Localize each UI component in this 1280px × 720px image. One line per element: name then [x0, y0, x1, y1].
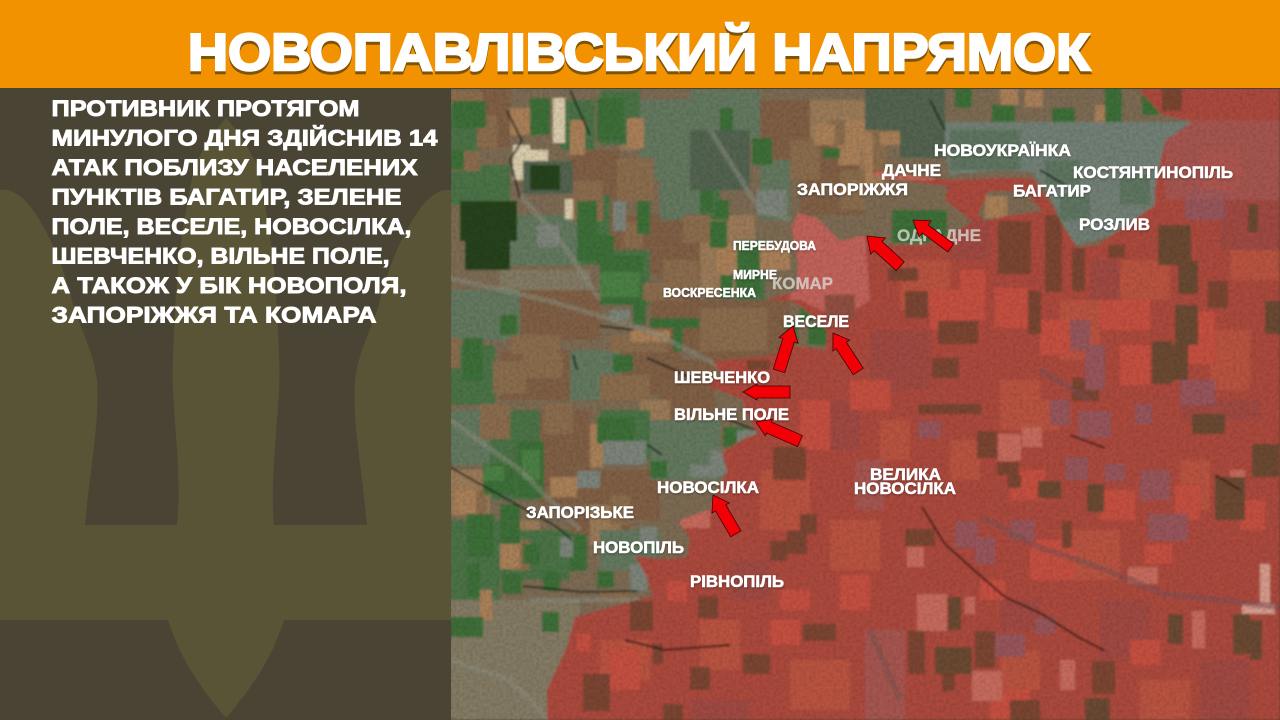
arrow: toward Новосілка	[704, 490, 744, 539]
faded settlement labels: ОДРАДНЕ	[897, 226, 981, 245]
map: satellite field mosaic with occupied zone	[450, 88, 1280, 720]
heading: attack summary text: А ТАКОЖ У БІК НОВОПОЛЯ,	[52, 273, 406, 298]
settlement labels: ВЕСЕЛЕ	[783, 313, 849, 331]
faded settlement labels: КОМАР	[772, 274, 833, 293]
arrow: toward Вільне Поле	[752, 414, 804, 449]
settlement labels: НОВОСІЛКА	[657, 479, 759, 497]
arrow: toward Веселе from south	[769, 323, 803, 374]
heading: attack summary text	[52, 96, 438, 328]
settlement labels: РОЗЛИВ	[1079, 216, 1150, 234]
heading: attack summary text: ПУНКТІВ БАГАТИР, ЗЕЛЕНЕ	[52, 184, 402, 210]
settlement labels: ЗАПОРІЖЖЯ	[797, 181, 908, 199]
arrow: toward Шевченко	[743, 384, 790, 400]
settlement labels: МИРНЕ	[733, 267, 777, 282]
settlement labels: БАГАТИР	[1013, 182, 1091, 200]
settlement labels: ВОСКРЕСЕНКА	[663, 285, 757, 300]
arrow: toward Одрадне	[907, 212, 957, 256]
heading: attack summary text: ЗАПОРІЖЖЯ ТА КОМАРА	[52, 302, 376, 328]
panel: left background with trident	[0, 88, 451, 720]
arrow: toward Веселе from south-east	[825, 328, 867, 377]
heading: attack summary text: АТАК ПОБЛИЗУ НАСЕЛЕНИХ	[52, 155, 417, 180]
settlement labels: НОВОУКРАЇНКА	[934, 142, 1071, 160]
heading: attack summary text: ПРОТИВНИК ПРОТЯГОМ	[52, 96, 360, 121]
settlement labels: ДАЧНЕ	[882, 162, 941, 180]
settlement labels: ВІЛЬНЕ ПОЛЕ	[674, 406, 789, 424]
icon: trident emblem	[0, 118, 451, 718]
faded settlement labels	[772, 226, 981, 293]
heading: attack summary text: МИНУЛОГО ДНЯ ЗДІЙСНИВ 14	[52, 126, 438, 150]
settlement labels: ЗАПОРІЗЬКЕ	[526, 504, 634, 522]
settlement labels	[526, 142, 1233, 591]
region: Комар built-up zone	[790, 213, 870, 320]
settlement labels: КОСТЯНТИНОПІЛЬ	[1073, 164, 1233, 182]
settlement labels: НОВОСІЛКА	[854, 480, 956, 498]
settlement labels: НОВОПІЛЬ	[593, 539, 684, 557]
heading: attack summary text: ПОЛЕ, ВЕСЕЛЕ, НОВОСІЛКА,	[52, 214, 412, 239]
region: occupied area	[546, 89, 1280, 720]
title bar	[0, 0, 1280, 88]
settlement labels: ШЕВЧЕНКО	[674, 369, 770, 387]
settlement labels: ВЕЛИКА	[870, 466, 941, 484]
settlement labels: РІВНОПІЛЬ	[690, 573, 784, 591]
title: НОВОПАВЛІВСЬКИЙ НАПРЯМОК	[188, 23, 1090, 82]
attack arrows	[704, 212, 957, 539]
arrow: toward Запоріжжя	[860, 228, 908, 274]
heading: attack summary text: ШЕВЧЕНКО, ВІЛЬНЕ ПОЛЕ,	[52, 244, 390, 268]
settlement labels: ПЕРЕБУДОВА	[733, 238, 817, 253]
